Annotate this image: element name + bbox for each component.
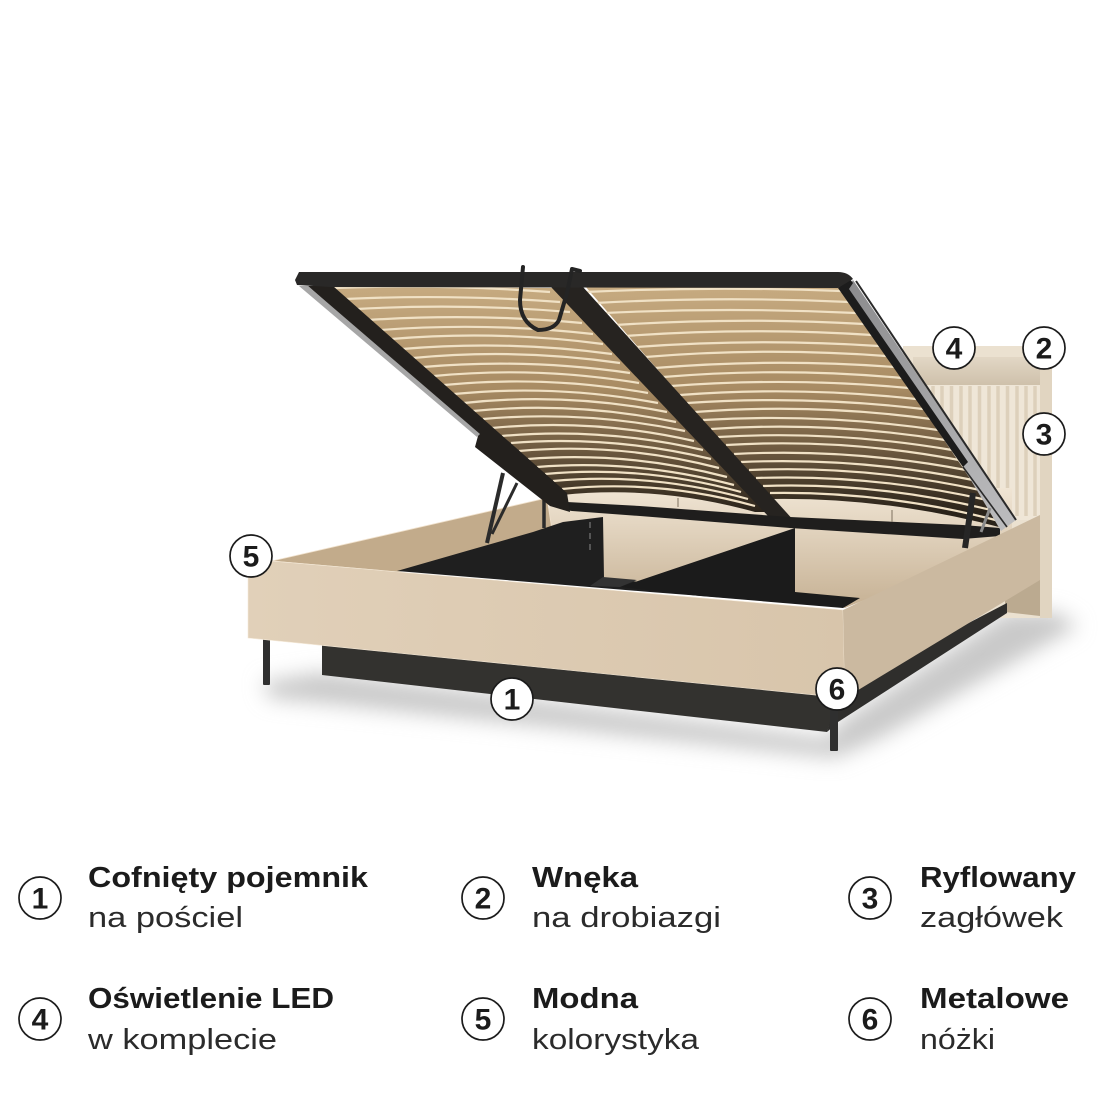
legend item 1: na pościel (88, 902, 243, 934)
legend item 2: 2 (475, 882, 491, 916)
legend item 2: na drobiazgi (532, 902, 721, 934)
callout 5 (230, 535, 272, 577)
legend item 6: 6 (862, 1004, 878, 1036)
headboard (903, 346, 1052, 618)
legend item 4: w komplecie (87, 1024, 277, 1056)
legend item 1: Cofnięty pojemnik (88, 862, 369, 894)
legend item 6: Metalowe (920, 983, 1069, 1015)
legend item 3 (849, 862, 1076, 934)
legend item 6 (849, 983, 1069, 1056)
storage compartment dividers and floor (397, 517, 860, 608)
bed illustration (248, 267, 1078, 758)
left lid rail (299, 286, 570, 512)
legend item 1 (19, 862, 369, 934)
legend item 3: Ryflowany (920, 862, 1076, 894)
left side wall of the frame (272, 498, 552, 572)
right leg (830, 700, 838, 751)
callout 5: 5 (243, 540, 259, 574)
legend item 3: 3 (862, 882, 878, 916)
legend item 2 (462, 862, 721, 934)
legend item 5: kolorystyka (532, 1024, 700, 1056)
gas lift struts (487, 473, 544, 543)
lower crossbar (552, 497, 1000, 539)
callout 2: 2 (1036, 332, 1052, 366)
callout 3: 3 (1036, 418, 1052, 452)
legend item 3: zagłówek (920, 902, 1064, 934)
pull strap (520, 267, 580, 330)
right lid rail (838, 279, 1016, 532)
front frame panel (248, 559, 845, 698)
callout 4: 4 (946, 332, 963, 366)
side frame panel (843, 515, 1040, 698)
legend item 4: Oświetlenie LED (88, 983, 334, 1015)
callout 1: 1 (504, 684, 520, 716)
callout 6: 6 (829, 674, 845, 706)
centre rail (551, 287, 795, 522)
legend item 6: nóżki (920, 1024, 995, 1056)
legend item 2: Wnęka (532, 862, 639, 894)
floor shadow (262, 612, 1078, 758)
callout 6 (816, 668, 858, 710)
callout 2 (1023, 327, 1065, 369)
legend item 5 (462, 983, 700, 1056)
small back wall marks (678, 498, 892, 522)
legend item 4 (19, 983, 334, 1056)
legend item 5: 5 (475, 1004, 491, 1036)
legend item 5: Modna (532, 983, 639, 1015)
raised lid with slatted base (295, 267, 1016, 548)
callout 3 (1023, 413, 1065, 455)
right slat panel (585, 286, 1003, 528)
storage back wall (548, 488, 1012, 608)
legend item 4: 4 (32, 1004, 49, 1036)
right gas lift strut (965, 493, 973, 548)
left leg (263, 636, 270, 685)
callout 4 (933, 327, 975, 369)
callout 1 (491, 678, 533, 720)
left slat panel (333, 286, 768, 512)
legend item 1: 1 (32, 882, 48, 916)
top lid bar (295, 272, 853, 288)
recessed black storage base (322, 603, 1007, 732)
